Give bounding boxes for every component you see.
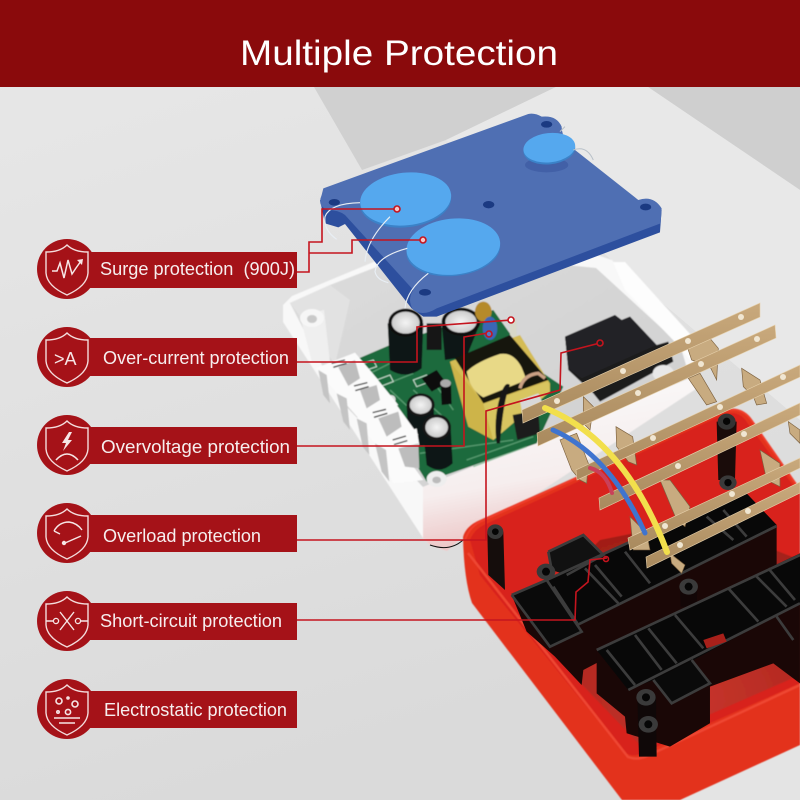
case rim — [468, 553, 800, 758]
label: short-circuit protection — [37, 591, 297, 651]
text: Surge protection (900J) — [100, 259, 295, 279]
rib block: upper — [512, 490, 777, 685]
wire: yellow — [545, 408, 667, 552]
text: Short-circuit protection — [100, 611, 282, 631]
label: overvoltage protection — [37, 415, 297, 475]
text: Electrostatic protection — [104, 700, 287, 720]
strip 1 — [522, 303, 760, 423]
outlet ports — [315, 353, 423, 483]
callout: surge — [297, 209, 397, 272]
callout: overvoltage — [297, 333, 488, 446]
label: overload protection — [37, 503, 297, 563]
relay — [565, 315, 674, 402]
circuit board — [355, 302, 563, 487]
case outer shell — [283, 222, 702, 551]
capacitors — [387, 308, 480, 470]
icon: amp shield: >A — [54, 349, 77, 369]
front wall — [423, 378, 702, 551]
plate side — [320, 200, 662, 317]
icon: gauge shield — [46, 509, 88, 559]
standoffs: front — [636, 689, 658, 757]
rib block: lower — [597, 553, 800, 747]
callout: over-current — [297, 320, 511, 362]
text: Overload protection — [103, 526, 261, 546]
plate top — [320, 114, 662, 313]
case inner floor — [290, 250, 690, 487]
screw post: left — [300, 309, 330, 362]
red lower case — [463, 409, 800, 800]
standoff: corner — [487, 524, 505, 590]
case outer — [463, 409, 800, 800]
label: surge protection — [37, 239, 297, 299]
strip 2 — [537, 325, 776, 446]
thin black cable — [430, 540, 463, 548]
title banner — [0, 0, 800, 87]
label: electrostatic protection — [37, 679, 297, 739]
strip 5 — [628, 458, 800, 550]
text: Over-current protection — [103, 348, 289, 368]
icon: lightning shield — [46, 421, 88, 471]
small components — [475, 302, 517, 340]
icon: particles shield — [46, 685, 88, 735]
text: Overvoltage protection — [101, 437, 290, 457]
icon: short-circuit shield — [46, 597, 88, 647]
callout lines — [297, 206, 608, 620]
icon: surge shield — [46, 245, 88, 295]
callout: overload — [297, 343, 600, 540]
disc varistor: small — [522, 127, 593, 167]
callout: short-circuit — [297, 558, 607, 620]
label: over-current protection — [37, 327, 297, 387]
wire: pink — [590, 468, 612, 493]
title: Multiple Protection — [240, 34, 558, 73]
case floor — [520, 520, 800, 745]
standoff: rear — [717, 414, 737, 490]
transformer — [450, 335, 550, 443]
standoff: middle — [537, 564, 555, 580]
strip 6 — [646, 482, 800, 568]
wire: blue — [553, 430, 645, 533]
disc varistor: large right — [375, 214, 503, 308]
white outlet base — [283, 222, 702, 551]
brass strips — [522, 303, 800, 573]
case inside wall — [470, 413, 800, 755]
strip 3 — [576, 365, 800, 480]
strip 4 — [599, 403, 800, 510]
disc varistor: large left — [325, 168, 454, 262]
wires — [545, 408, 667, 552]
black inner ribs — [487, 490, 800, 757]
blue top plate — [320, 114, 662, 317]
icon: amp shield — [46, 333, 88, 383]
brass tabs — [560, 338, 800, 573]
